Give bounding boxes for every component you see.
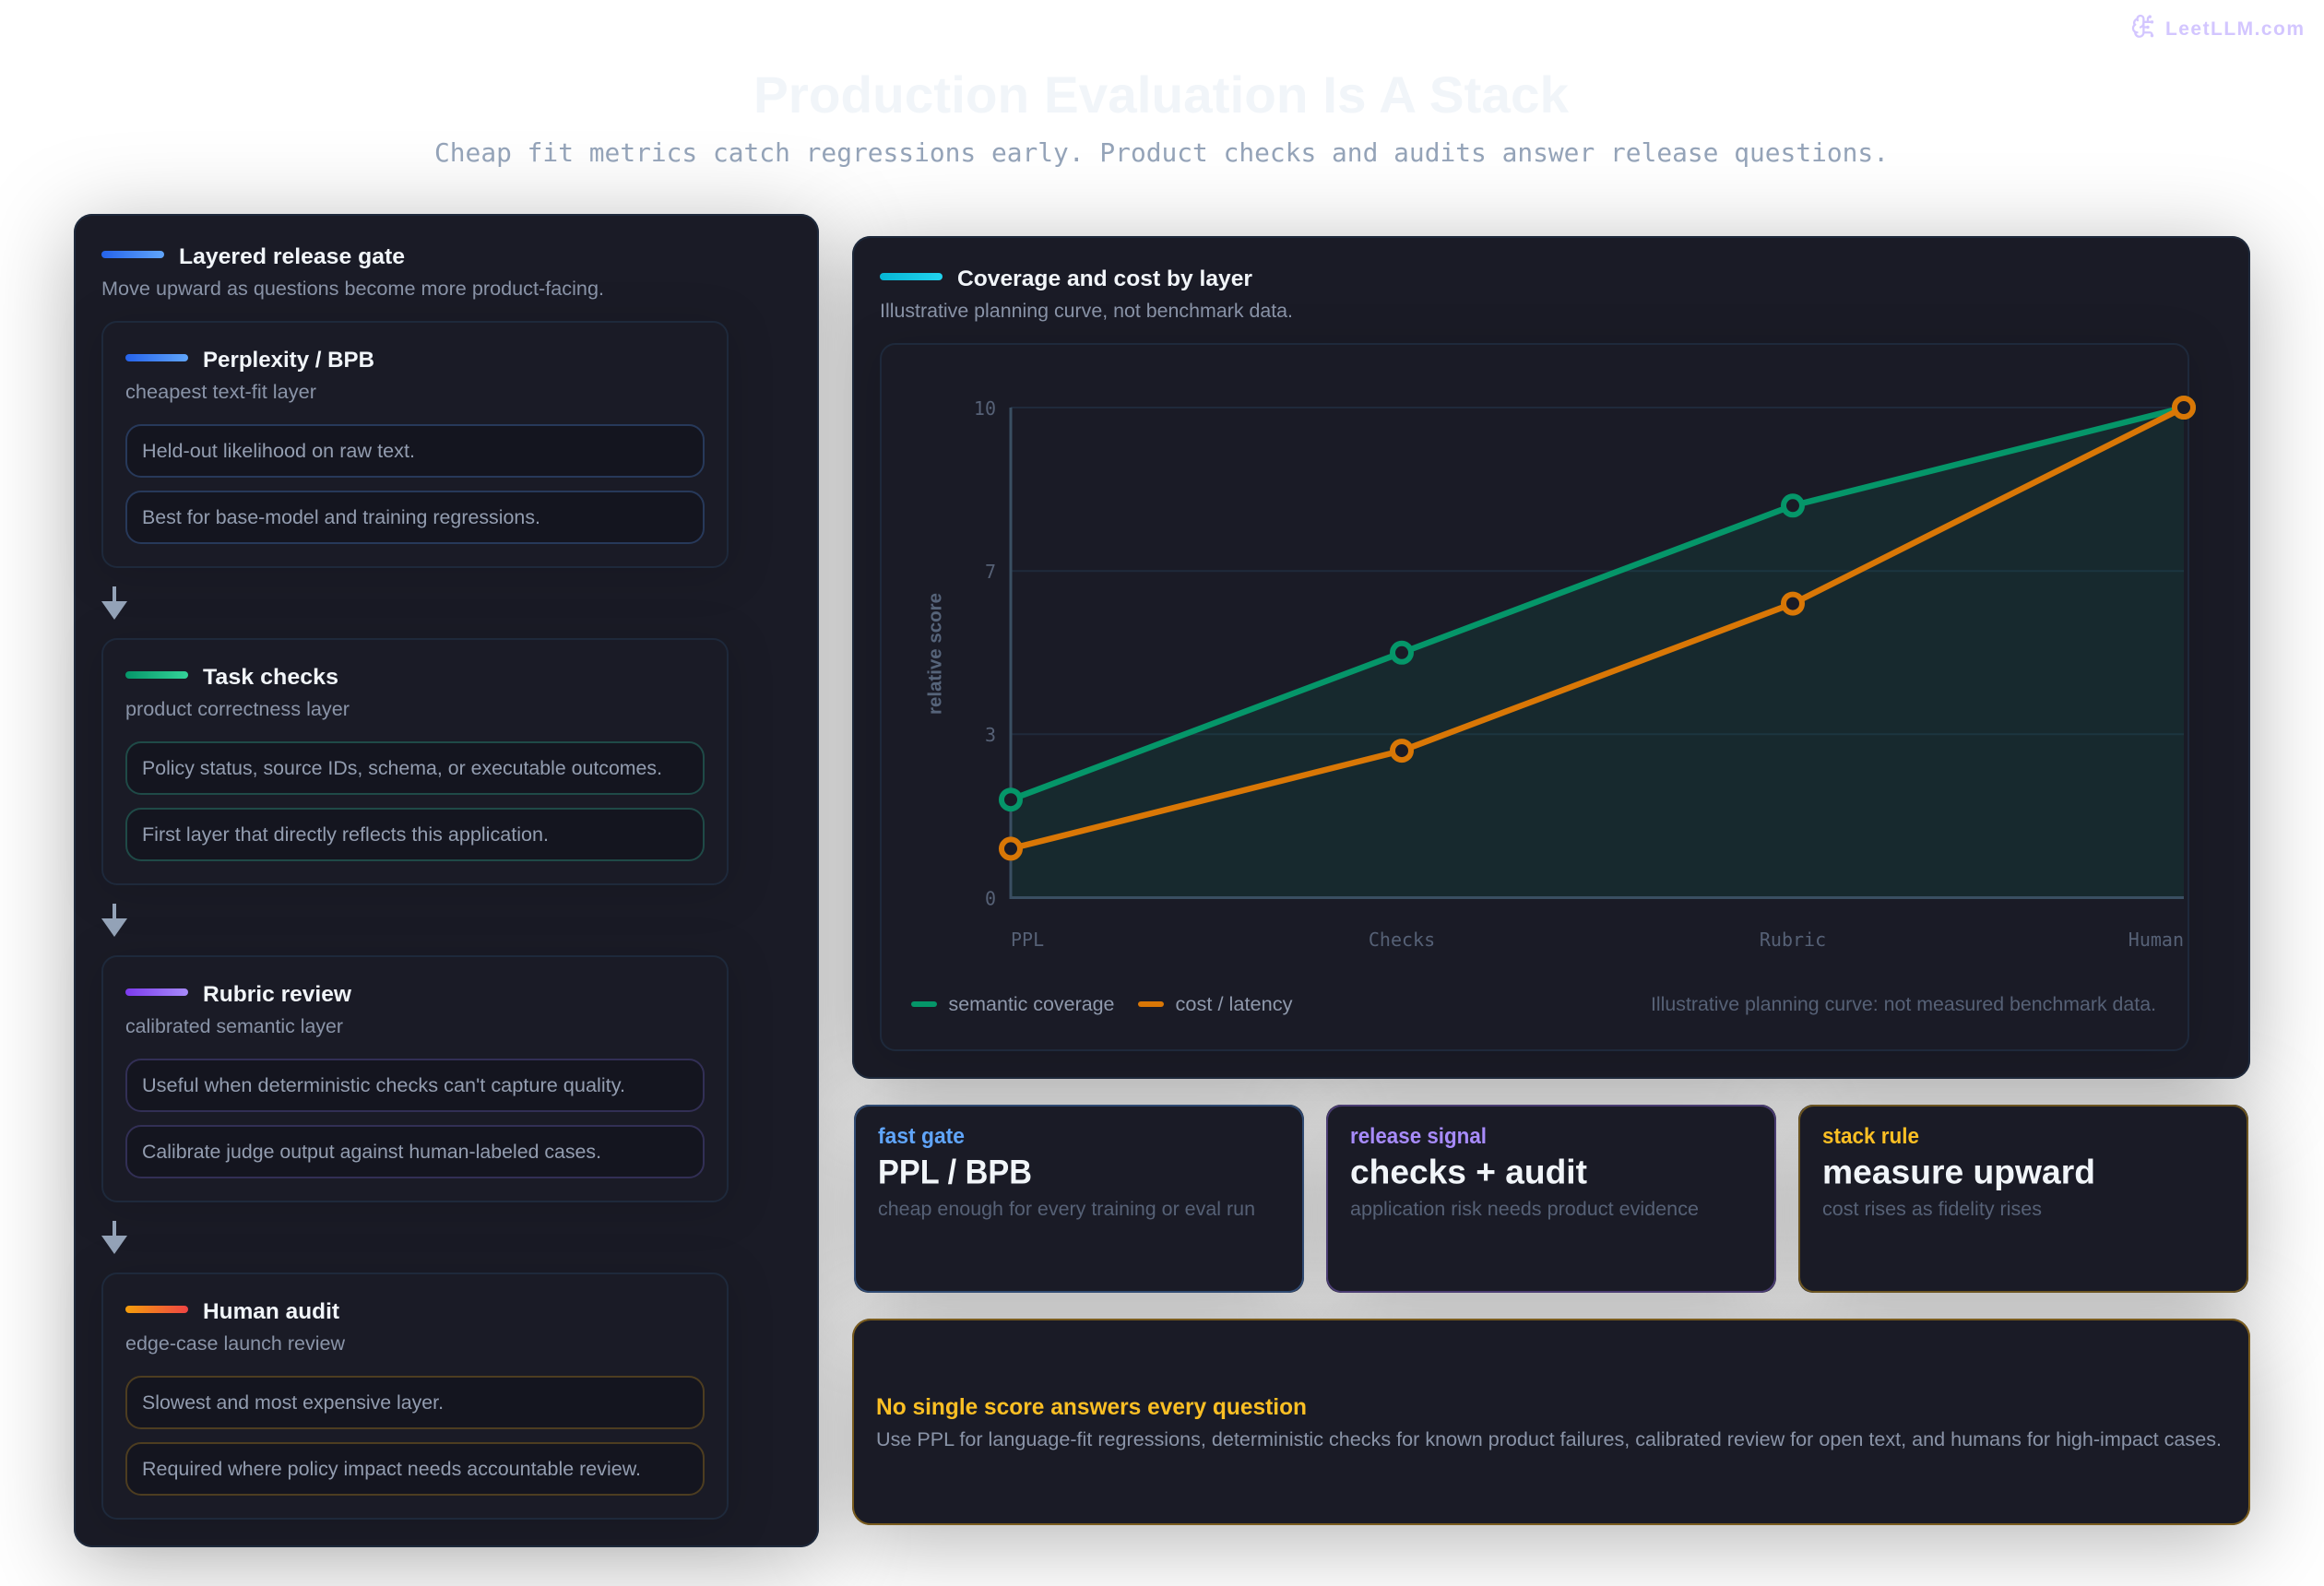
layer card: Perplexity / BPB: Perplexity / BPB <box>203 348 374 373</box>
layer card: Perplexity / BPB: cheapest text-fit layer <box>125 382 316 403</box>
series: cost / latency <box>1002 398 2193 858</box>
line chart <box>926 397 2193 951</box>
arrow: down to rubric review <box>101 904 127 937</box>
layer card: Human audit: Slowest and most expensive layer. <box>142 1392 444 1414</box>
layer card: Human audit: Required where policy impact needs accountable review. <box>142 1459 641 1480</box>
legend <box>911 994 1293 1015</box>
layer card: Rubric review: calibrated semantic layer <box>125 1016 343 1037</box>
arrow: down to human audit <box>101 1221 127 1254</box>
stat card: fast gate: PPL / BPB <box>878 1153 1032 1191</box>
x axis tick labels: Rubric <box>1760 929 1826 951</box>
stat card: release signal: application risk needs product evidence <box>1350 1199 1699 1220</box>
layer card: Rubric review: Calibrate judge output against human-labeled cases. <box>142 1142 601 1163</box>
layer card: Rubric review: Rubric review <box>203 982 351 1007</box>
y axis tick labels <box>974 397 996 909</box>
panel description: Move upward as questions become more product-facing. <box>101 278 604 300</box>
watermark: LeetLLM.com: LeetLLM.com <box>2165 18 2304 40</box>
chart card <box>881 344 2188 1050</box>
x axis tick labels: Checks <box>1369 929 1435 951</box>
stat card: release signal: checks + audit <box>1350 1153 1587 1191</box>
layer card: Perplexity / BPB: Best for base-model and training regressions. <box>142 507 540 528</box>
layer card: Human audit: edge-case launch review <box>125 1333 346 1355</box>
layer card: Rubric review: Useful when deterministic checks can't capture quality. <box>142 1075 625 1096</box>
y axis tick labels: 3 <box>985 724 996 746</box>
layer card: Task checks: Policy status, source IDs, schema, or executable outcomes. <box>142 758 662 779</box>
accent bar: layered release gate <box>101 251 164 258</box>
stat card: release signal: release signal <box>1350 1124 1487 1149</box>
arrow: down to task checks <box>101 586 127 620</box>
layer card: Task checks: product correctness layer <box>125 699 350 720</box>
layer card: Rubric review <box>102 956 728 1201</box>
x axis tick labels: PPL <box>1011 929 1044 951</box>
stat card: fast gate <box>855 1106 1303 1292</box>
y axis title: relative score <box>926 593 946 715</box>
stat card: stack rule <box>1799 1106 2247 1292</box>
area under coverage line <box>1011 408 2184 898</box>
stat card: fast gate: fast gate <box>878 1124 965 1149</box>
subtitle: Cheap fit metrics catch regressions early. Product checks and audits answer release questions. <box>434 137 1889 168</box>
layer card: Human audit <box>102 1273 728 1519</box>
stat card: stack rule: stack rule <box>1822 1124 1919 1149</box>
chart footnote: Illustrative planning curve: not measured benchmark data. <box>1651 994 2156 1015</box>
y axis tick labels: 7 <box>985 561 996 583</box>
layer card: Task checks: Task checks <box>203 665 338 690</box>
heading: coverage and cost: Coverage and cost by layer <box>957 266 1252 291</box>
y axis tick labels: 0 <box>985 887 996 909</box>
legend: semantic coverage <box>948 994 1114 1015</box>
title: Production Evaluation Is A Stack <box>753 65 1570 124</box>
panel: layered release gate <box>75 215 818 1546</box>
panel: coverage and cost chart <box>853 237 2249 1078</box>
stat card: stack rule: cost rises as fidelity rises <box>1822 1199 2042 1220</box>
layer card: Perplexity / BPB <box>102 322 728 567</box>
icon: brain circuit <box>2133 16 2152 37</box>
stat card: fast gate: cheap enough for every training or eval run <box>878 1199 1255 1220</box>
layer card: Task checks <box>102 639 728 884</box>
series: semantic coverage <box>1002 398 2193 809</box>
y axis tick labels: 10 <box>974 397 996 420</box>
callout: no single score <box>853 1320 2249 1524</box>
layer card: Perplexity / BPB: Held-out likelihood on raw text. <box>142 441 415 462</box>
callout: no single score: Use PPL for language-fit regressions, deterministic checks for known product failures, calibrated review for open text, and humans for high-impact cases. <box>876 1429 2222 1450</box>
stat card: stack rule: measure upward <box>1822 1153 2095 1191</box>
callout: no single score: No single score answers every question <box>876 1394 1307 1420</box>
x axis tick labels <box>1011 929 2184 951</box>
x axis tick labels: Human <box>2128 929 2184 951</box>
layer card: Human audit: Human audit <box>203 1299 339 1324</box>
chart description: Illustrative planning curve, not benchmark data. <box>880 301 1293 322</box>
layer card: Task checks: First layer that directly reflects this application. <box>142 824 549 846</box>
legend: cost / latency <box>1175 994 1293 1015</box>
heading: layered release gate: Layered release gate <box>179 244 405 269</box>
stat card: release signal <box>1327 1106 1775 1292</box>
accent bar: coverage and cost <box>880 273 943 280</box>
